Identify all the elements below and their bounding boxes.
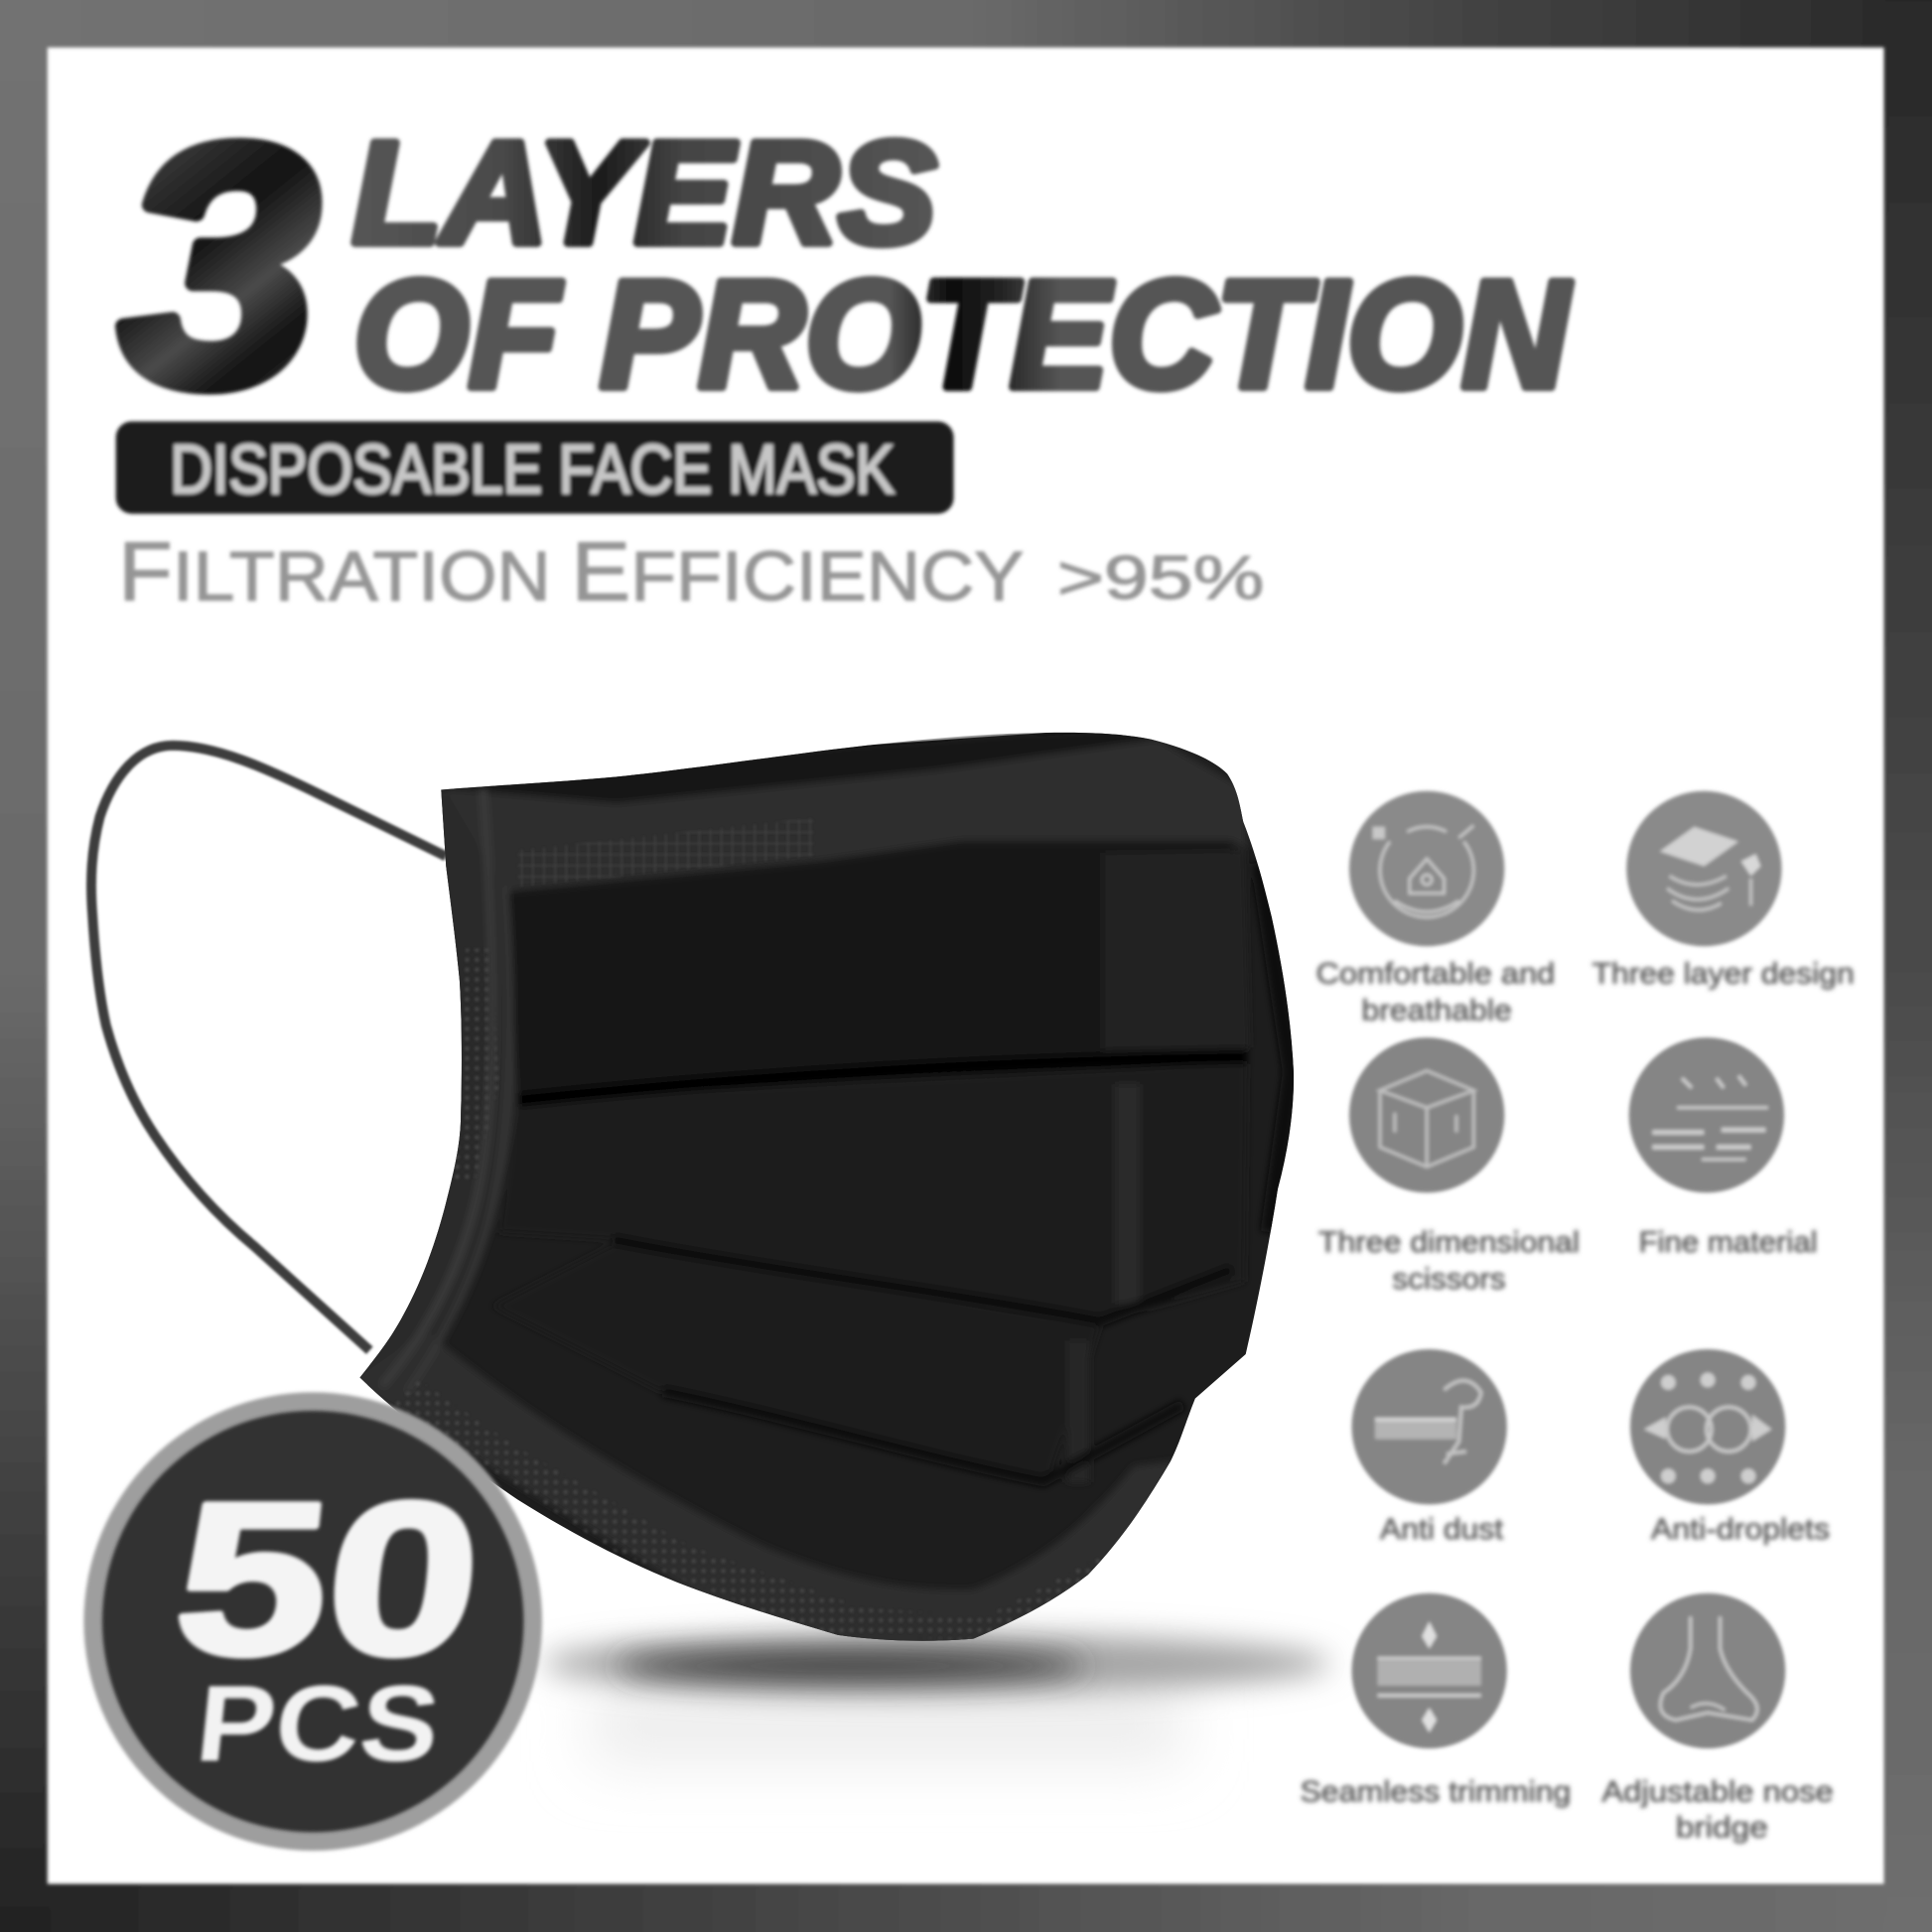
upper pleat highlight — [1103, 850, 1249, 1049]
icon: three layer design — [1626, 791, 1782, 946]
title: 3 Layers of Protection — [121, 75, 1572, 456]
pleat shadow three — [663, 1391, 1182, 1481]
label: fine material: Fine material — [1639, 1226, 1818, 1259]
middle pleat — [522, 1066, 1198, 1314]
dark top fold edge — [446, 730, 1159, 803]
icon: fine material — [1629, 1037, 1784, 1192]
mask body — [345, 715, 1307, 1651]
top nose band — [446, 733, 1247, 891]
badge ring — [83, 1392, 542, 1851]
filtration efficiency line — [118, 524, 1264, 618]
banner: disposable face mask — [116, 421, 954, 514]
icon: anti droplets — [1630, 1349, 1785, 1504]
badge unit: PCS — [191, 1664, 445, 1784]
feature icons — [1349, 791, 1785, 1748]
badge disc — [102, 1411, 523, 1832]
icon: anti dust — [1351, 1349, 1507, 1504]
label: three layer design: Three layer design — [1591, 957, 1855, 990]
filtration value: >95% — [1057, 544, 1264, 613]
icon: three dimensional scissors — [1349, 1037, 1504, 1192]
icon: seamless trimming — [1351, 1593, 1507, 1748]
label: adjustable nose bridge: bridge — [1676, 1811, 1768, 1844]
label: three dimensional scissors — [1318, 1226, 1580, 1296]
badge number: 50 — [165, 1458, 491, 1700]
label: seamless trimming: Seamless trimming — [1300, 1775, 1571, 1808]
label: three dimensional scissors: Three dimensional — [1318, 1226, 1580, 1259]
label: adjustable nose bridge: Adjustable nose — [1601, 1775, 1834, 1808]
bottom seam band — [351, 1330, 1182, 1651]
ear loop — [91, 746, 446, 1350]
label: comfortable and breathable — [1315, 957, 1555, 1028]
left weave — [454, 949, 499, 1182]
band weave — [517, 818, 813, 888]
label: comfortable and breathable: Comfortable and — [1315, 957, 1555, 990]
feature labels — [1300, 957, 1855, 1844]
middle pleat strip — [1115, 1084, 1140, 1304]
title line: of protection: OF PROTECTION — [353, 249, 1572, 420]
label: three dimensional scissors: scissors — [1392, 1263, 1506, 1296]
50 pcs badge — [83, 1392, 542, 1851]
lower right strip — [1067, 1340, 1089, 1482]
left seam band — [351, 788, 517, 1386]
icon: comfortable and breathable — [1349, 791, 1504, 946]
lower pleat — [612, 1245, 1104, 1474]
label: adjustable nose bridge — [1601, 1775, 1834, 1844]
label: comfortable and breathable: breathable — [1361, 995, 1512, 1028]
icon: adjustable nose bridge — [1630, 1593, 1785, 1748]
pleat shadow one — [517, 1057, 1247, 1100]
left seam lines — [382, 788, 492, 1386]
mask ground shadow — [542, 1634, 1330, 1762]
label: anti dust: Anti dust — [1380, 1513, 1504, 1546]
big numeral 3: 3 — [121, 75, 318, 456]
bottom weave — [394, 1380, 1189, 1641]
filtration label: FILTRATION EFFICIENCY — [118, 524, 1024, 618]
label: anti droplets: Anti-droplets — [1651, 1513, 1830, 1546]
right edge shading — [1259, 863, 1292, 1232]
title line: layers: LAYERS — [352, 111, 936, 274]
pleat shadow two — [613, 1240, 1232, 1320]
upper pleat — [505, 843, 1247, 1099]
face mask — [345, 715, 1307, 1651]
banner text: DISPOSABLE FACE MASK — [170, 430, 895, 507]
